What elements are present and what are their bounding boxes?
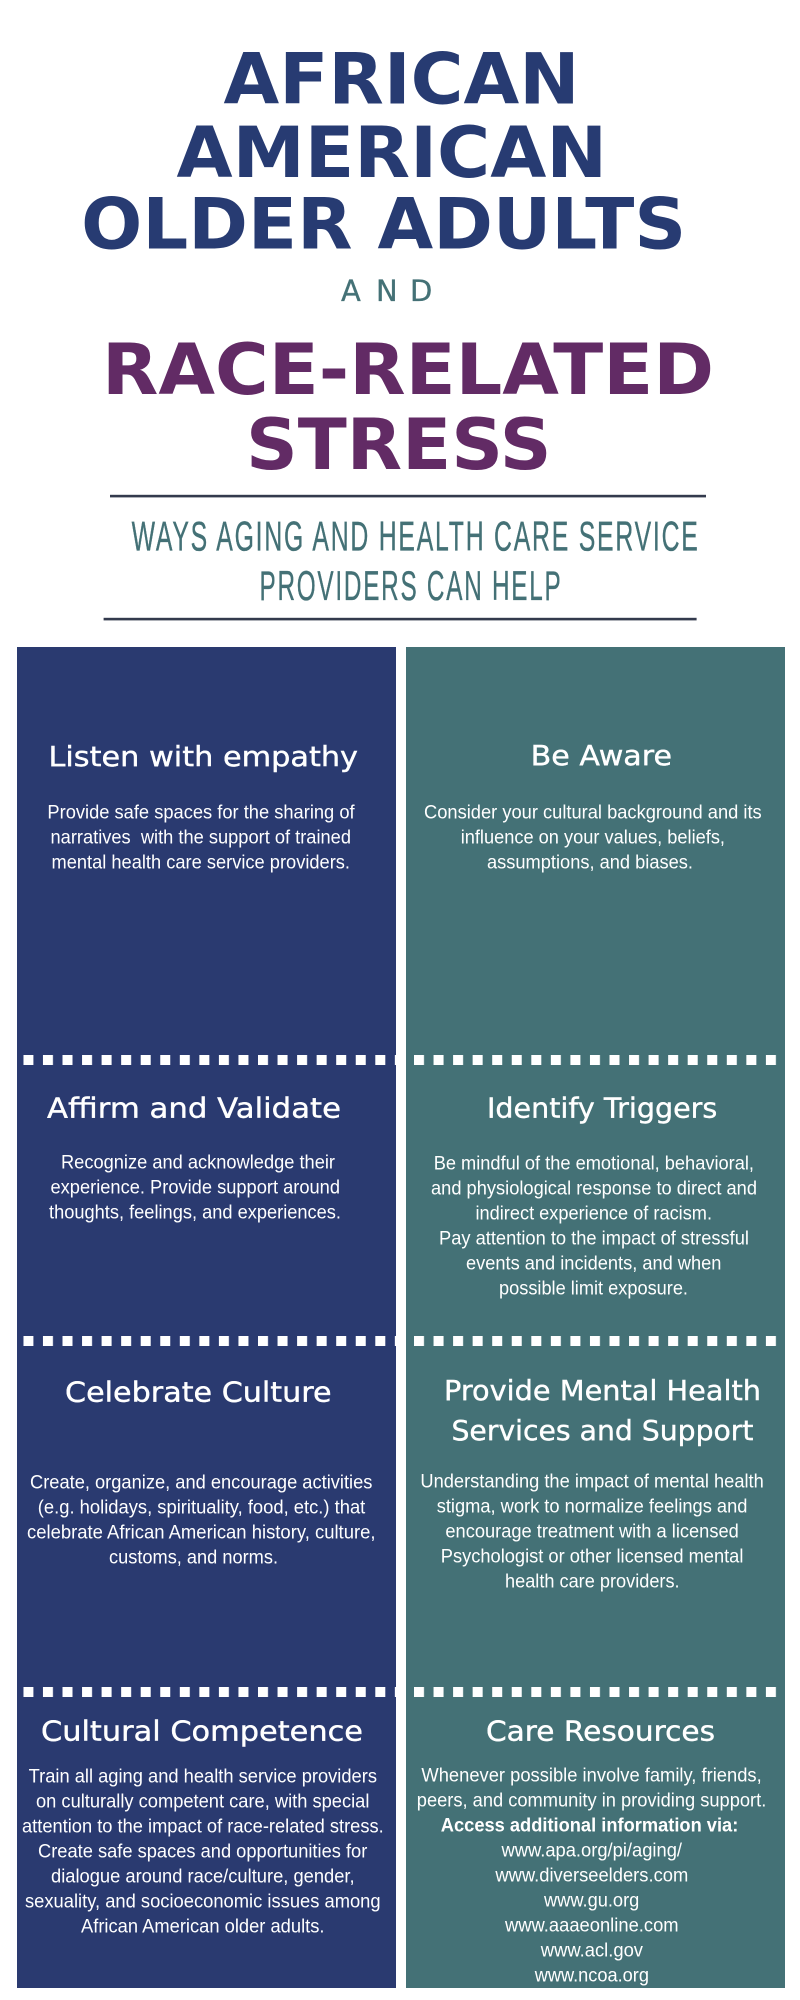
panel: Care Resources: Access additional information via: (441, 1814, 738, 1836)
panel: Care Resources: www.gu.org (543, 1889, 639, 1911)
panel: Cultural Competence: Create safe spaces and opportunities for (38, 1840, 368, 1862)
heading: and: AND (341, 274, 432, 308)
panel: Provide Mental Health Services and Support: Provide Mental Health (444, 1374, 761, 1407)
panel: Care Resources (417, 1715, 766, 1986)
panel: Provide Mental Health Services and Support: health care providers. (505, 1570, 680, 1592)
panel: Provide Mental Health Services and Support: encourage treatment with a licensed (445, 1520, 739, 1542)
panel: Care Resources: peers, and community in providing support. (417, 1789, 766, 1811)
panel: Identify Triggers: Pay attention to the impact of stressful (439, 1228, 749, 1250)
panel: Identify Triggers (431, 1092, 757, 1300)
panel: Cultural Competence: sexuality, and socioeconomic issues among (25, 1890, 381, 1912)
panel: Identify Triggers: events and incidents, and when (466, 1252, 721, 1274)
panel: Listen with empathy (47, 740, 358, 874)
title: African American Older Adults: OLDER ADULTS (81, 184, 686, 266)
panel: Care Resources: www.diverseelders.com (494, 1864, 688, 1886)
panel: right column background (406, 647, 785, 1988)
panel: Identify Triggers: and physiological response to direct and (431, 1178, 757, 1200)
title: African American Older Adults: AFRICAN (224, 38, 580, 120)
panel: Provide Mental Health Services and Support: Services and Support (452, 1414, 754, 1447)
panel: Cultural Competence: attention to the impact of race-related stress. (22, 1815, 384, 1837)
panel: Celebrate Culture: Celebrate Culture (65, 1376, 332, 1408)
panel: Celebrate Culture: Create, organize, and encourage activities (30, 1471, 373, 1493)
panel: Listen with empathy: narratives with the support of trained (50, 827, 351, 849)
panel: Affirm and Validate: experience. Provide support around (50, 1177, 340, 1199)
panel: Celebrate Culture (27, 1376, 376, 1568)
panel: Care Resources: Care Resources (486, 1715, 715, 1748)
panel: Celebrate Culture: celebrate African American history, culture, (27, 1521, 376, 1543)
panel: Care Resources: www.aaaeonline.com (504, 1914, 679, 1936)
panel: Celebrate Culture: (e.g. holidays, spirituality, food, etc.) that (38, 1496, 366, 1518)
panel: Cultural Competence: on culturally competent care, with special (36, 1790, 369, 1812)
subtitle: ways providers can help (132, 512, 700, 609)
panel: Listen with empathy: Provide safe spaces for the sharing of (47, 802, 355, 824)
panel: Identify Triggers: Identify Triggers (487, 1092, 717, 1125)
panel: Affirm and Validate: Recognize and acknowledge their (61, 1152, 335, 1174)
panel: Provide Mental Health Services and Support: stigma, work to normalize feelings and (437, 1495, 747, 1517)
panel: Cultural Competence: dialogue around race/culture, gender, (51, 1865, 355, 1887)
title: African American Older Adults: AMERICAN (176, 112, 607, 194)
panel: Identify Triggers: Be mindful of the emotional, behavioral, (434, 1152, 754, 1174)
panel: Provide Mental Health Services and Support (420, 1374, 764, 1592)
title: Race-Related Stress: STRESS (246, 404, 552, 486)
title: Race-Related Stress (102, 329, 714, 486)
panel: Be Aware: Be Aware (531, 739, 672, 772)
panel: Be Aware: assumptions, and biases. (487, 852, 693, 874)
panel: Celebrate Culture: customs, and norms. (109, 1546, 278, 1568)
panel: Cultural Competence: Train all aging and health service providers (29, 1765, 377, 1787)
panel: Provide Mental Health Services and Support: Psychologist or other licensed mental (441, 1545, 743, 1567)
panel: Listen with empathy: Listen with empathy (48, 740, 358, 773)
panel: Cultural Competence (22, 1715, 384, 1937)
panel: Be Aware: Consider your cultural background and its (424, 802, 762, 824)
panel: left column background (17, 647, 396, 1988)
panel: Be Aware (424, 739, 762, 874)
panel: Affirm and Validate (47, 1092, 341, 1224)
title: African American Older Adults (81, 38, 686, 266)
subtitle: ways providers can help: PROVIDERS CAN HELP (260, 562, 562, 609)
panel: Care Resources: www.ncoa.org (534, 1964, 649, 1986)
panel: Identify Triggers: possible limit exposure. (499, 1278, 688, 1300)
panel: Affirm and Validate: Affirm and Validate (47, 1092, 341, 1125)
panel: Listen with empathy: mental health care service providers. (52, 852, 350, 874)
panel: Care Resources: Whenever possible involve family, friends, (421, 1764, 762, 1786)
panel: Cultural Competence: Cultural Competence (41, 1715, 363, 1748)
panel: Provide Mental Health Services and Support: Understanding the impact of mental health (420, 1470, 764, 1492)
panel: Care Resources: www.apa.org/pi/aging/ (501, 1839, 683, 1861)
panel: Care Resources: www.acl.gov (540, 1939, 643, 1961)
panel: Be Aware: influence on your values, beliefs, (461, 827, 725, 849)
panel: Cultural Competence: African American older adults. (81, 1915, 324, 1937)
panel: Identify Triggers: indirect experience of racism. (476, 1202, 712, 1224)
panel: Affirm and Validate: thoughts, feelings, and experiences. (49, 1202, 341, 1224)
title: Race-Related Stress: RACE-RELATED (102, 329, 714, 411)
